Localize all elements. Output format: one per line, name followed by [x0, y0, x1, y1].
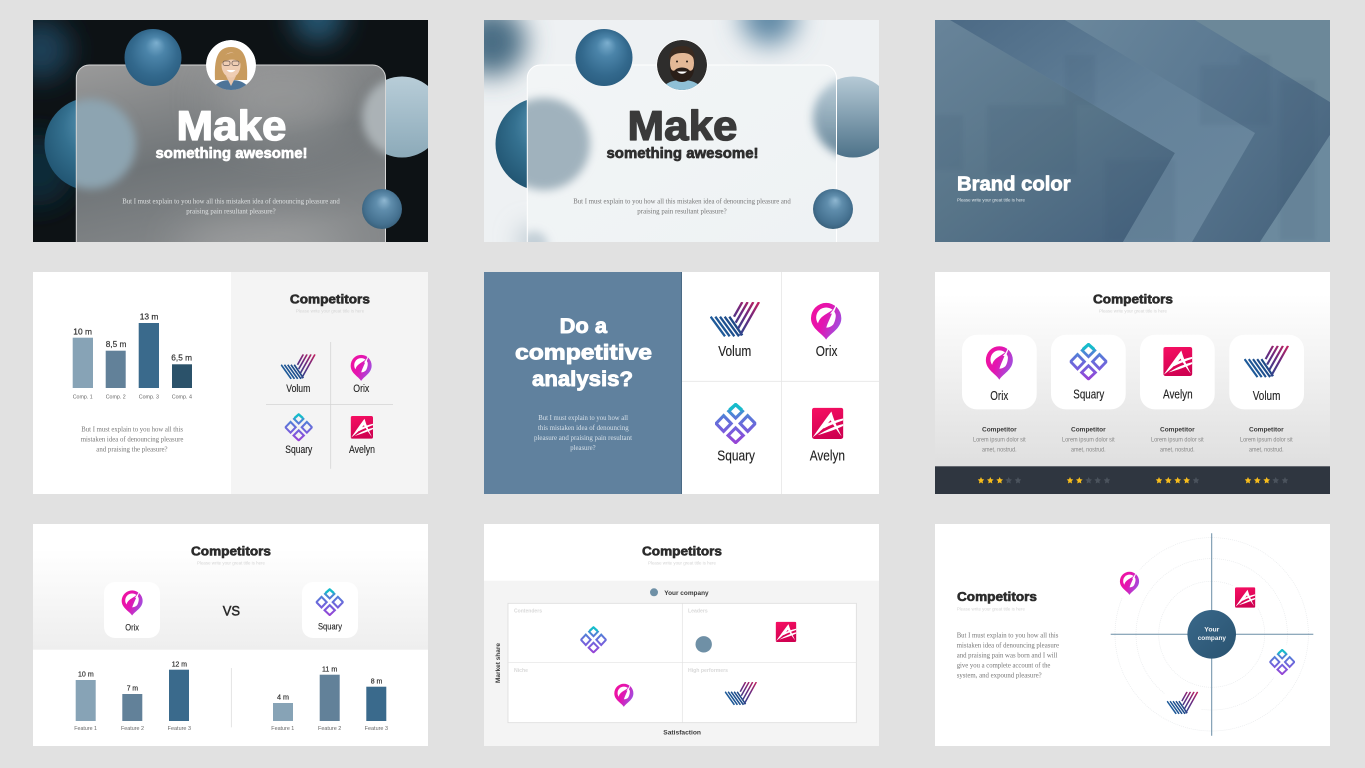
legend: your company [650, 588, 709, 597]
text block: and praising pain was born and I will [957, 651, 1057, 659]
slide: radial positioning [935, 524, 1330, 746]
bar chart: left: Feature 1 [74, 726, 97, 732]
logo: Avelyn: Avelyn [349, 444, 375, 456]
slide: do a competitive analysis [484, 272, 879, 494]
logo: Orix: Orix [816, 344, 838, 360]
card: Avelyn: Avelyn [1163, 388, 1193, 402]
heading [515, 314, 652, 391]
card: Orix: Orix [125, 623, 139, 634]
panel: competitors [231, 272, 428, 494]
quadrant chart: High performers [688, 668, 728, 674]
bar chart: right: 8 m [371, 679, 382, 686]
subtitle: Please write your great title is here [1099, 309, 1167, 314]
card: Squary: Squary [1073, 388, 1105, 402]
quadrant chart: Niche [514, 668, 528, 674]
text block: give you a complete account of the [957, 661, 1050, 669]
logo: Squary: Squary [285, 444, 313, 456]
card captions [973, 426, 1293, 454]
bar chart: right: Feature 1 [271, 726, 294, 732]
bar chart: left [74, 661, 191, 732]
legend: your company: Your company [664, 590, 709, 597]
background chevrons [935, 20, 1330, 242]
title: Competitors [642, 545, 722, 559]
avatar: woman [206, 40, 256, 92]
bar chart: 6,5 m [171, 353, 192, 363]
text block: system, and expound pleasure? [957, 671, 1042, 679]
subtitle: Please write your great title is here [197, 561, 265, 566]
card captions: amet, nostrud. [982, 448, 1017, 454]
center: your company: Your [1204, 626, 1220, 633]
body text: praising pain resultant pleasure? [637, 208, 727, 216]
subheading: something awesome! [156, 145, 308, 162]
center: your company: company [1198, 635, 1226, 642]
subtitle: Please write your great title is here [296, 309, 365, 314]
logo: Orix [351, 354, 372, 395]
logo: Volum [711, 302, 759, 360]
text block: But I must explain to you how all this [81, 425, 183, 433]
body text [573, 198, 791, 216]
logo: Volum: Volum [718, 344, 751, 360]
quadrant chart [508, 603, 856, 723]
body text: this mistaken idea of denouncing [538, 424, 629, 432]
title: Competitors [290, 293, 370, 307]
body text: pleasure? [570, 444, 596, 452]
panel: question [484, 272, 682, 494]
card captions: Lorem ipsum dolor sit [1062, 438, 1115, 444]
card: Orix [104, 582, 160, 638]
marker: your company [696, 636, 712, 652]
logo: Orix [811, 301, 841, 360]
logo: Squary [285, 414, 313, 456]
card captions: Lorem ipsum dolor sit [1240, 438, 1293, 444]
heading: Make: Make [628, 102, 738, 149]
card captions: amet, nostrud. [1249, 448, 1284, 454]
body text: praising pain resultant pleasure? [186, 208, 276, 216]
text block: mistaken idea of denouncing pleasure [957, 641, 1059, 649]
card captions: amet, nostrud. [1160, 448, 1195, 454]
radial chart [1111, 533, 1313, 736]
subtitle: Please write your great title is here [957, 606, 1025, 611]
title: Competitors [1093, 293, 1173, 307]
sphere: top [576, 29, 632, 86]
bar chart: right: 4 m [277, 695, 289, 702]
card captions: Competitor [982, 426, 1017, 433]
bar chart: left: 7 m [127, 686, 138, 693]
body text: pleasure and praising pain resultant [534, 434, 632, 442]
sphere: small [813, 189, 853, 229]
heading: competitive [515, 340, 652, 364]
text block: and praising the pleasure? [96, 445, 168, 453]
sphere: small [362, 189, 402, 229]
bar chart: Comp. 2 [106, 395, 126, 401]
card: Orix [962, 335, 1037, 409]
text block [957, 631, 1059, 679]
heading: analysis? [532, 367, 633, 391]
subtitle: Please write your great title is here [957, 198, 1025, 203]
sphere: top [124, 29, 182, 86]
logo: Avelyn [810, 408, 845, 464]
bar chart: right [271, 667, 388, 732]
logo: Avelyn: Avelyn [810, 448, 845, 464]
card: Avelyn [1140, 335, 1215, 409]
slide: light title [484, 20, 879, 242]
text block: mistaken idea of denouncing pleasure [81, 435, 183, 443]
heading: Brand color: Brand color [957, 172, 1071, 196]
axis label: satisfaction: Satisfaction [663, 730, 701, 737]
card: Squary [1051, 335, 1126, 409]
logo: Orix [614, 683, 633, 707]
rating bar [935, 466, 1330, 494]
card captions: Lorem ipsum dolor sit [973, 438, 1026, 444]
heading: Do a [560, 314, 608, 338]
slide: bar chart and logos [33, 272, 428, 494]
card: Squary: Squary [318, 621, 342, 632]
card captions: Lorem ipsum dolor sit [1151, 438, 1204, 444]
avatar: man [656, 39, 708, 92]
VS label: VS [223, 603, 240, 618]
bar chart: left: 10 m [78, 672, 94, 679]
logo: Avelyn [1228, 580, 1262, 614]
card captions: Competitor [1160, 426, 1195, 433]
subtitle: Please write your great title is here [648, 561, 716, 566]
card: Squary [302, 582, 358, 638]
text block: But I must explain to you how all this [957, 631, 1059, 639]
heading: Make: Make [176, 102, 286, 149]
slide: dark title [33, 20, 428, 242]
bar chart: right: Feature 2 [318, 726, 341, 732]
bar chart: right: 11 m [322, 667, 337, 674]
card: Orix: Orix [990, 389, 1009, 403]
body text: But I must explain to you how all this mistaken idea of denouncing pleasure and [573, 198, 791, 206]
body text [122, 198, 340, 216]
logo: Volum: Volum [286, 383, 310, 395]
logo: Squary [1264, 644, 1300, 680]
body text: But I must explain to you how all this mistaken idea of denouncing pleasure and [122, 198, 340, 206]
bar chart: 13 m [140, 312, 158, 322]
slide: versus comparison [33, 524, 428, 746]
logo: Squary: Squary [717, 448, 756, 464]
bar chart: Comp. 3 [139, 395, 159, 401]
axis label: market share: Market share [495, 643, 502, 683]
bar chart: left: Feature 2 [121, 726, 144, 732]
card captions: Competitor [1071, 426, 1106, 433]
subheading: something awesome! [606, 145, 758, 162]
bar chart: left: Feature 3 [168, 726, 191, 732]
bar chart: left: 12 m [172, 661, 187, 668]
bar chart: 8,5 m [106, 339, 126, 349]
body text [534, 414, 632, 452]
slide: competitor cards with ratings [935, 272, 1330, 494]
logo: Volum [281, 354, 315, 395]
logo: Squary [581, 627, 606, 652]
bar chart: 10 m [73, 326, 92, 336]
title: Competitors [191, 545, 271, 559]
logo: Avelyn [349, 416, 375, 456]
card: Volum: Volum [1253, 389, 1280, 403]
logo: Orix [1112, 566, 1146, 600]
quadrant chart: Contenders [514, 609, 542, 615]
title: Competitors [957, 590, 1037, 604]
slide: quadrant matrix [484, 524, 879, 747]
card captions: Competitor [1249, 426, 1284, 433]
logo: Volum [1162, 683, 1202, 723]
logo: Squary [716, 404, 756, 464]
card captions: amet, nostrud. [1071, 448, 1106, 454]
bar chart [73, 312, 192, 401]
slide: brand color [935, 20, 1330, 242]
card: Volum [1229, 335, 1304, 409]
text block [81, 425, 183, 453]
bar chart: Comp. 4 [172, 395, 192, 401]
center: your company [1187, 610, 1236, 659]
quadrant chart: Leaders [688, 609, 708, 615]
logo: Orix: Orix [353, 383, 370, 395]
logo: Volum [725, 682, 756, 705]
bar chart: Comp. 1 [73, 395, 93, 401]
body text: But I must explain to you how all [538, 414, 628, 422]
bar chart: right: Feature 3 [365, 726, 388, 732]
logo: Avelyn [776, 622, 796, 642]
